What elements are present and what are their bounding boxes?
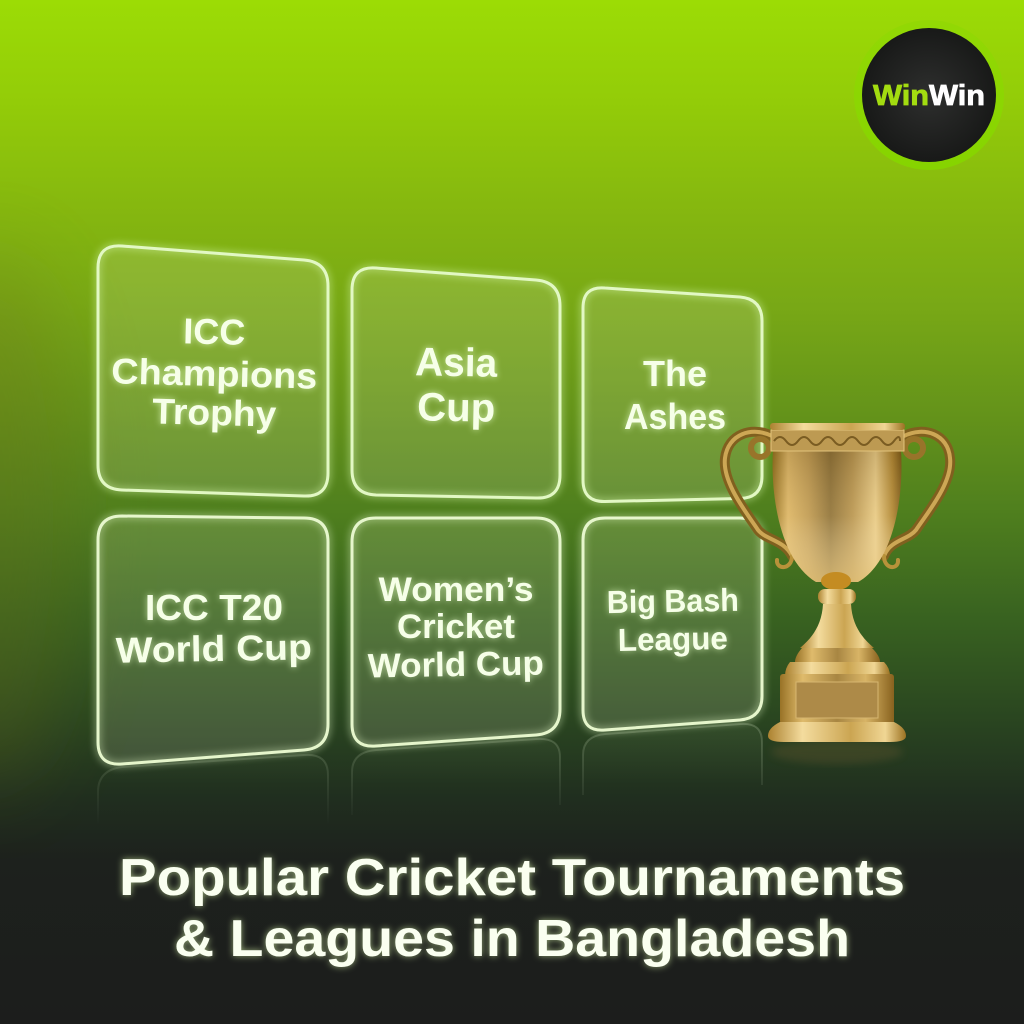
- base tier 2: [785, 662, 890, 676]
- cup bowl: [773, 450, 901, 582]
- title: Popular Cricket Tournaments: [119, 849, 905, 907]
- label: ICC Champions Trophy: Trophy: [152, 390, 277, 435]
- plinth: [780, 674, 894, 724]
- rim top: [770, 423, 905, 430]
- label: Women's Cricket World Cup: Women’s: [378, 571, 534, 609]
- panel: Women's Cricket World Cup: [352, 518, 560, 746]
- stem collar: [818, 589, 856, 604]
- label: ICC T20 World Cup: World Cup: [115, 626, 312, 671]
- knop: [821, 572, 851, 590]
- logo disc: [862, 28, 996, 162]
- base tier 1: [795, 648, 880, 662]
- label: Big Bash League: Big Bash: [607, 582, 739, 620]
- foot: [768, 722, 906, 742]
- ornate rim band: [771, 430, 904, 451]
- label: Asia Cup: Asia: [415, 340, 498, 386]
- stem: [800, 604, 874, 648]
- icon: gold trophy: [725, 423, 950, 764]
- label: Asia Cup: Cup: [417, 385, 496, 431]
- title: & Leagues in Bangladesh: [174, 910, 850, 968]
- label: Big Bash League: Big Bash: [607, 582, 739, 620]
- plaque: [796, 682, 878, 718]
- label: Women's Cricket World Cup: [367, 571, 544, 686]
- label: ICC Champions Trophy: ICC: [183, 310, 246, 353]
- label: Women's Cricket World Cup: Cricket: [397, 608, 515, 646]
- logo: WinWin badge: [854, 20, 1004, 170]
- label: Big Bash League: [607, 582, 739, 658]
- label: ICC Champions Trophy: Champions: [111, 350, 318, 397]
- label: Asia Cup: Cup: [417, 385, 496, 431]
- label: Women's Cricket World Cup: World Cup: [367, 644, 544, 686]
- cup bowl shading: [773, 450, 901, 582]
- label: ICC T20 World Cup: ICC T20: [145, 587, 283, 628]
- right handle: [884, 432, 950, 567]
- band engraving: [774, 437, 900, 445]
- label: Big Bash League: League: [618, 620, 728, 658]
- label: Women's Cricket World Cup: World Cup: [367, 644, 544, 686]
- panel: The Ashes: [583, 288, 762, 502]
- panel: ICC T20 World Cup: [98, 516, 328, 764]
- label: ICC T20 World Cup: World Cup: [115, 626, 312, 671]
- label: ICC Champions Trophy: [111, 310, 318, 435]
- title: Popular Cricket Tournaments: [119, 849, 905, 907]
- label: Asia Cup: Asia: [415, 340, 498, 386]
- logo wordmark: WinWin: [873, 80, 985, 112]
- panel: ICC Champions Trophy: [98, 246, 328, 496]
- title: [119, 849, 905, 968]
- label: ICC Champions Trophy: Champions: [111, 350, 318, 397]
- panel: Big Bash League: [583, 518, 762, 730]
- label: Women's Cricket World Cup: Women’s: [378, 571, 534, 609]
- label: The Ashes: The: [643, 353, 707, 394]
- label: ICC Champions Trophy: ICC: [183, 310, 246, 353]
- label: ICC Champions Trophy: Trophy: [152, 390, 277, 435]
- label: The Ashes: [624, 353, 726, 437]
- label: ICC T20 World Cup: [115, 587, 312, 671]
- label: The Ashes: Ashes: [624, 396, 726, 437]
- panel: Asia Cup: [352, 268, 560, 498]
- left handle: [725, 432, 792, 567]
- label: Big Bash League: League: [618, 620, 728, 658]
- label: ICC T20 World Cup: ICC T20: [145, 587, 283, 628]
- label: Women's Cricket World Cup: Cricket: [397, 608, 515, 646]
- label: The Ashes: The: [643, 353, 707, 394]
- trophy reflection: [771, 740, 903, 764]
- label: Asia Cup: [415, 340, 498, 431]
- panel reflections on floor: [98, 724, 762, 832]
- logo ring: [854, 20, 1004, 170]
- title: & Leagues in Bangladesh: [174, 910, 850, 968]
- label: The Ashes: Ashes: [624, 396, 726, 437]
